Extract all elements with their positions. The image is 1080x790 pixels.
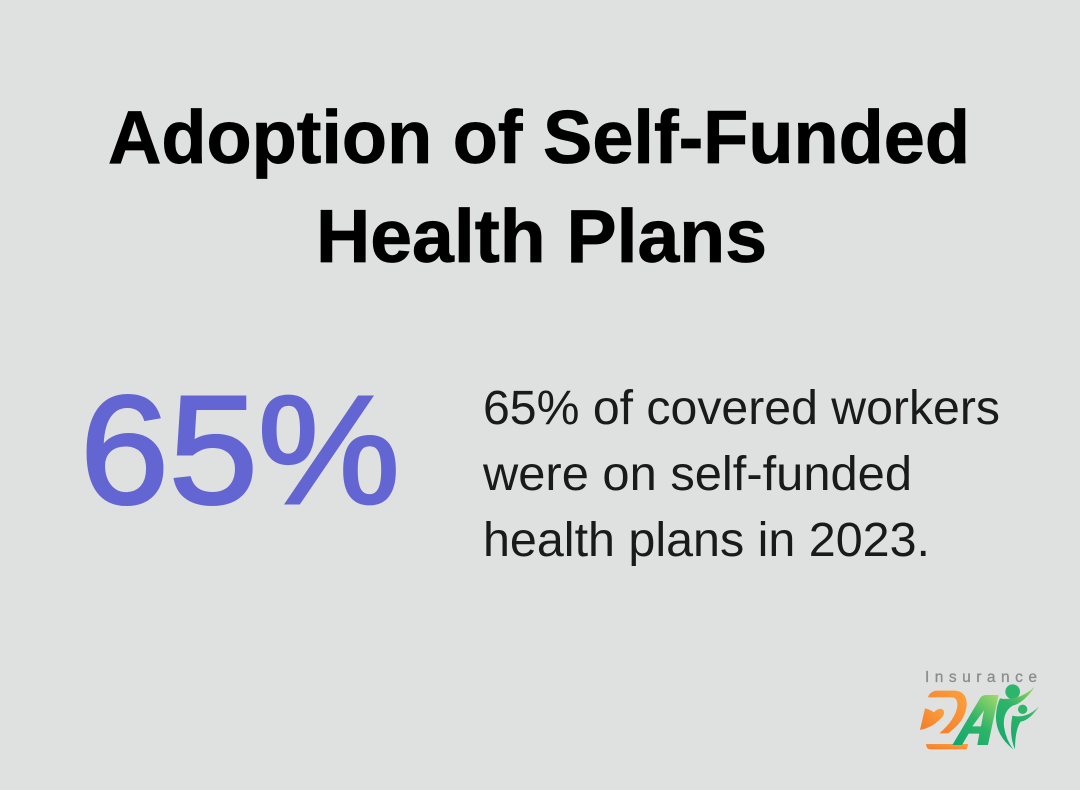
- description text: [482, 382, 1000, 567]
- logo artwork: [920, 684, 1039, 749]
- logo icon: large figure: [1005, 684, 1020, 699]
- description text: were on self-funded: [482, 448, 912, 501]
- big statistic: 65%: 65%: [80, 364, 400, 536]
- logo wordmark: Insurance: [925, 669, 1037, 686]
- title: [108, 95, 970, 278]
- title: Adoption of Self-Funded: [108, 95, 970, 179]
- logo icon: green A: [952, 695, 999, 745]
- logo icon: heart: [920, 708, 944, 730]
- title: Health Plans: [316, 194, 767, 278]
- logo: Insurance2Ai: [920, 669, 1039, 749]
- description text: health plans in 2023.: [483, 514, 930, 567]
- description text: 65% of covered workers: [483, 382, 1000, 435]
- logo icon: orange 2: [928, 691, 967, 733]
- logo icon: small figure: [1018, 705, 1027, 714]
